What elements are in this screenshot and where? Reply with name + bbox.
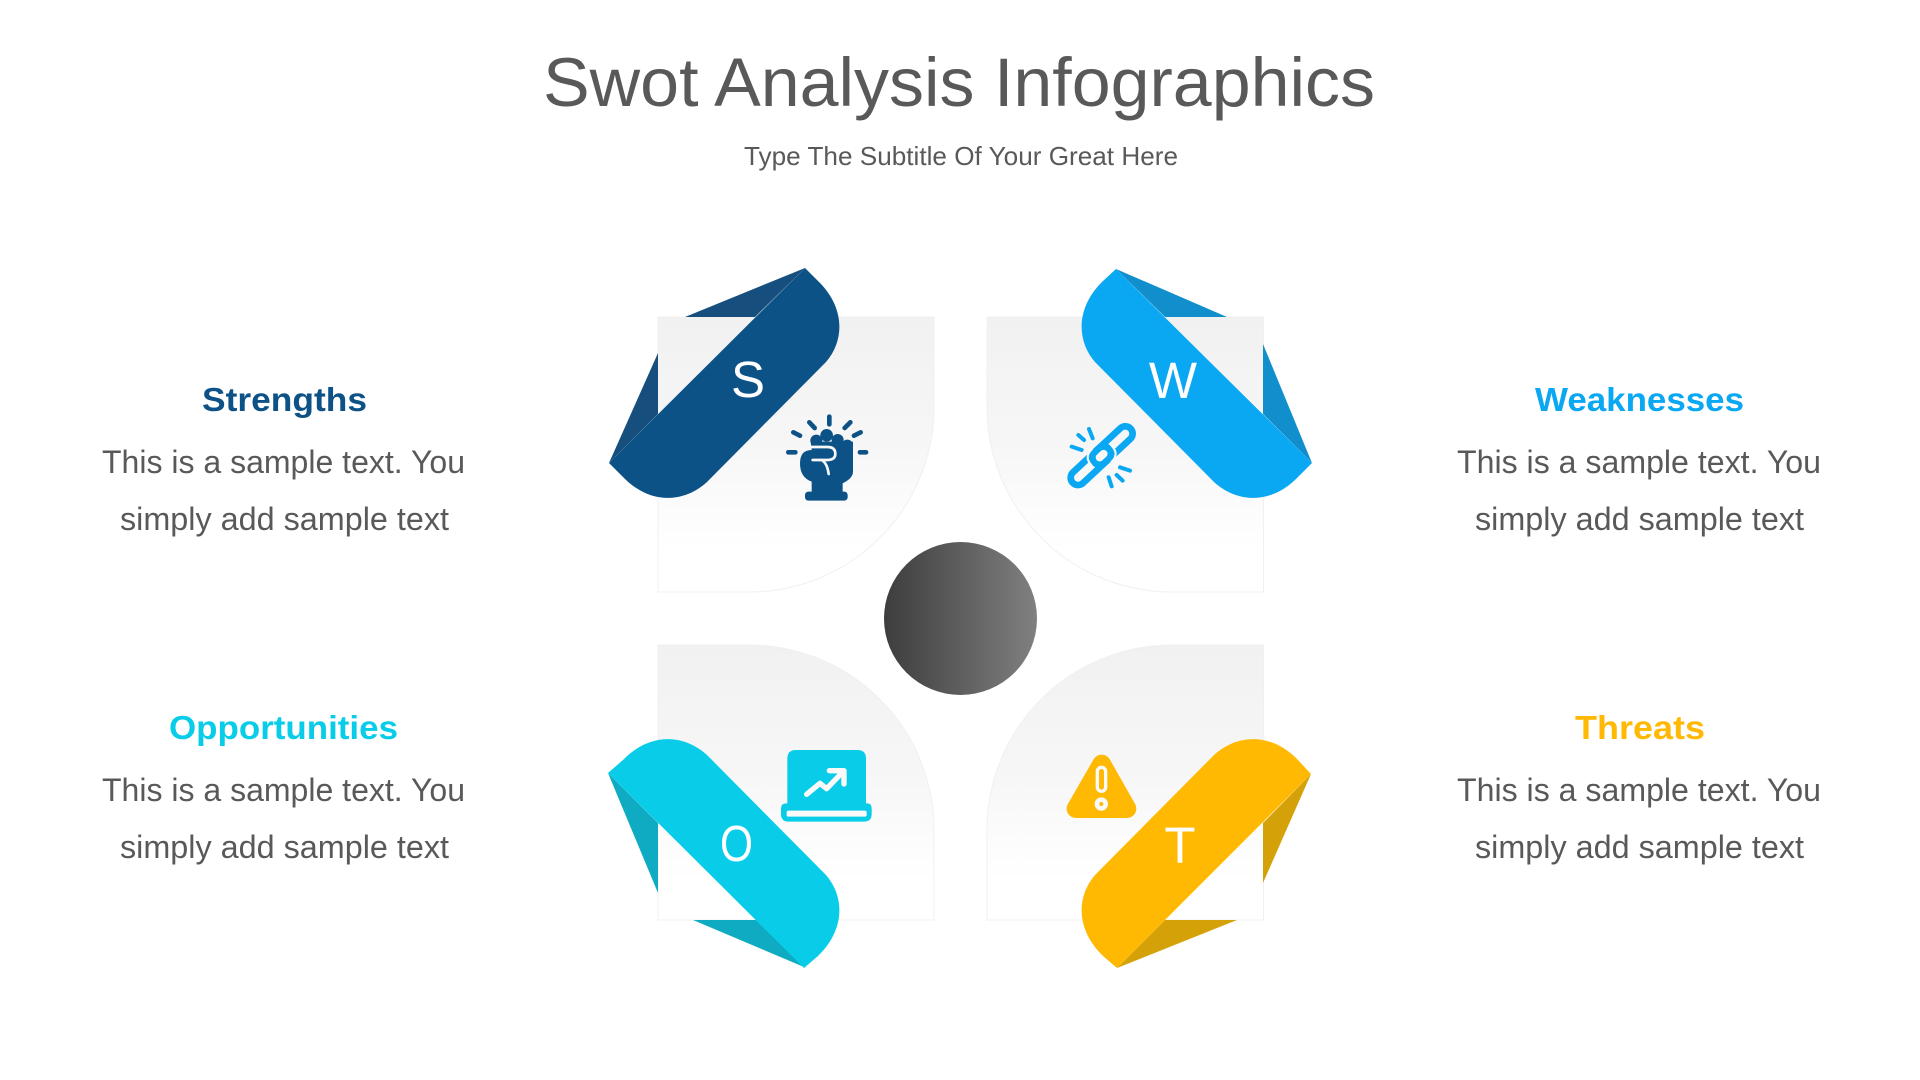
body: weaknesses: This is a sample text. You [1457,444,1821,480]
text block: weaknesses [1457,381,1821,537]
heading: opportunities: Opportunities [169,709,398,746]
panel: opportunities graphic [608,645,934,968]
icon: raised fist [788,417,866,501]
panel: weaknesses graphic [987,269,1312,592]
heading: strengths: Strengths [202,381,367,418]
body: strengths: This is a sample text. You [102,444,465,480]
body: threats: simply add sample text [1475,829,1804,865]
ribbon fold: strengths [609,268,805,463]
title: Swot Analysis Infographics [543,44,1375,121]
letter T: T [1164,817,1196,874]
panel: strengths graphic [609,268,934,592]
ribbon fold: weaknesses [1116,269,1312,463]
ribbon: opportunities [608,739,839,968]
ribbon fold: threats [1117,774,1311,968]
body: threats: This is a sample text. You [1457,772,1821,808]
panel: threats graphic [987,645,1311,968]
icon: laptop with rising chart [781,750,872,822]
letter O: O [720,815,753,872]
heading: threats: Threats [1575,709,1705,746]
body: opportunities [102,772,465,865]
ribbon: strengths [609,268,839,498]
center circle [884,542,1037,695]
body: opportunities: simply add sample text [120,829,449,865]
text block: threats [1457,709,1821,865]
letter W: W [1149,352,1197,409]
panel background: weaknesses [987,317,1264,592]
ribbon fold: opportunities [608,773,804,967]
body: weaknesses [1457,444,1821,537]
heading: weaknesses: Weaknesses [1535,381,1744,418]
panel background: strengths [658,317,934,592]
panel background: opportunities [658,645,934,920]
body: opportunities: This is a sample text. You [102,772,465,808]
text block: opportunities [102,709,465,865]
icon: warning triangle [1076,764,1127,809]
body: weaknesses: simply add sample text [1475,501,1804,537]
letter S: S [731,351,765,408]
icon: broken chain link [1065,420,1138,491]
body: strengths: simply add sample text [120,501,449,537]
body: threats [1457,772,1821,865]
text block: strengths [102,381,465,537]
body: strengths [102,444,465,537]
panel background: threats [987,645,1264,920]
subtitle: Type The Subtitle Of Your Great Here [744,141,1178,171]
ribbon: weaknesses [1082,269,1312,498]
ribbon: threats [1082,739,1311,968]
